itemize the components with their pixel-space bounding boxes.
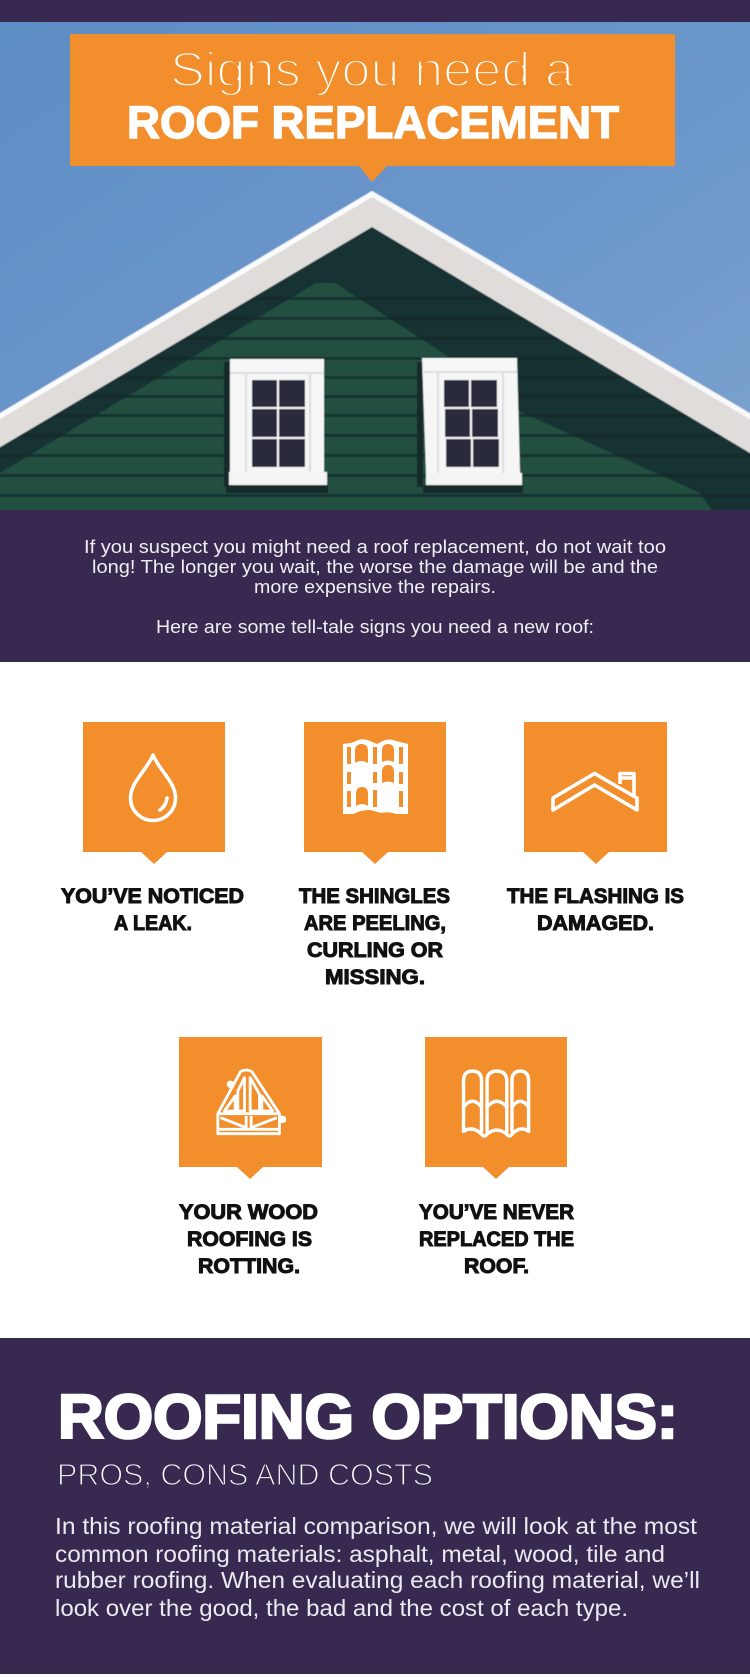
icon: tile roof: [464, 1071, 529, 1136]
label: never replaced: [419, 1201, 574, 1278]
heading: roofing options: ROOFING OPTIONS:: [58, 1383, 678, 1452]
top purple band: [0, 0, 750, 22]
title line: Signs you need a: Signs you need a: [170, 44, 574, 97]
label: shingles: THE SHINGLES: [299, 885, 450, 908]
paragraph: rubber roofing. When evaluating each roofing material, we’ll: [55, 1567, 700, 1593]
sign card: wood rot: [179, 1037, 322, 1278]
label: wood rot: ROOFING IS: [187, 1228, 312, 1251]
paragraph: common roofing materials: asphalt, metal, wood, tile and: [55, 1541, 665, 1567]
label: shingles: MISSING.: [325, 966, 425, 989]
label: flashing: DAMAGED.: [537, 912, 654, 935]
label: leak: A LEAK.: [114, 912, 192, 935]
sign card: flashing: [507, 722, 684, 935]
paragraph: look over the good, the bad and the cost of each type.: [55, 1595, 628, 1621]
label: wood rot: YOUR WOOD: [179, 1201, 318, 1224]
label: flashing: [507, 885, 684, 935]
intro paragraph: Here are some tell-tale signs you need a new roof:: [156, 617, 594, 637]
label: shingles: ARE PEELING,: [304, 912, 446, 935]
label: flashing: THE FLASHING IS: [507, 885, 684, 908]
sign card: leak: [61, 722, 244, 935]
roof eaves: [0, 191, 750, 465]
label: wood rot: ROTTING.: [198, 1255, 300, 1278]
sign card: shingles: [299, 722, 450, 989]
label: never replaced: REPLACED THE: [419, 1228, 574, 1251]
hero photo: gabled house against blue sky: [0, 0, 750, 530]
intro paragraph: more expensive the repairs.: [254, 577, 496, 597]
label: shingles: [299, 885, 450, 989]
right window: [422, 358, 522, 485]
icon: shingle rows: [343, 739, 408, 814]
label: never replaced: YOU’VE NEVER: [419, 1201, 574, 1224]
left window: [229, 359, 327, 485]
label: shingles: CURLING OR: [307, 939, 443, 962]
title line: Roof Replacement: ROOF REPLACEMENT: [127, 97, 619, 148]
intro panel: [0, 510, 750, 662]
label: leak: YOU’VE NOTICED: [61, 885, 244, 908]
intro paragraph: [84, 537, 666, 637]
intro paragraph: long! The longer you wait, the worse the damage will be and the: [92, 557, 658, 577]
subheading: PROS, CONS AND COSTS: [57, 1457, 433, 1492]
label: wood rot: [179, 1201, 318, 1278]
icon: roof with chimney: [553, 774, 637, 810]
paragraph: In this roofing material comparison, we will look at the most: [55, 1513, 698, 1539]
roofing options panel: [0, 1338, 750, 1674]
paragraph: [55, 1513, 700, 1621]
sign card: never replaced: [419, 1037, 574, 1278]
intro paragraph: If you suspect you might need a roof replacement, do not wait too: [84, 537, 666, 557]
siding wall: [0, 220, 750, 530]
label: never replaced: ROOF.: [464, 1255, 529, 1278]
label: leak: [61, 885, 244, 935]
icon: wood truss: [218, 1070, 285, 1134]
title banner: [70, 34, 675, 182]
icon: water drop: [130, 755, 176, 820]
